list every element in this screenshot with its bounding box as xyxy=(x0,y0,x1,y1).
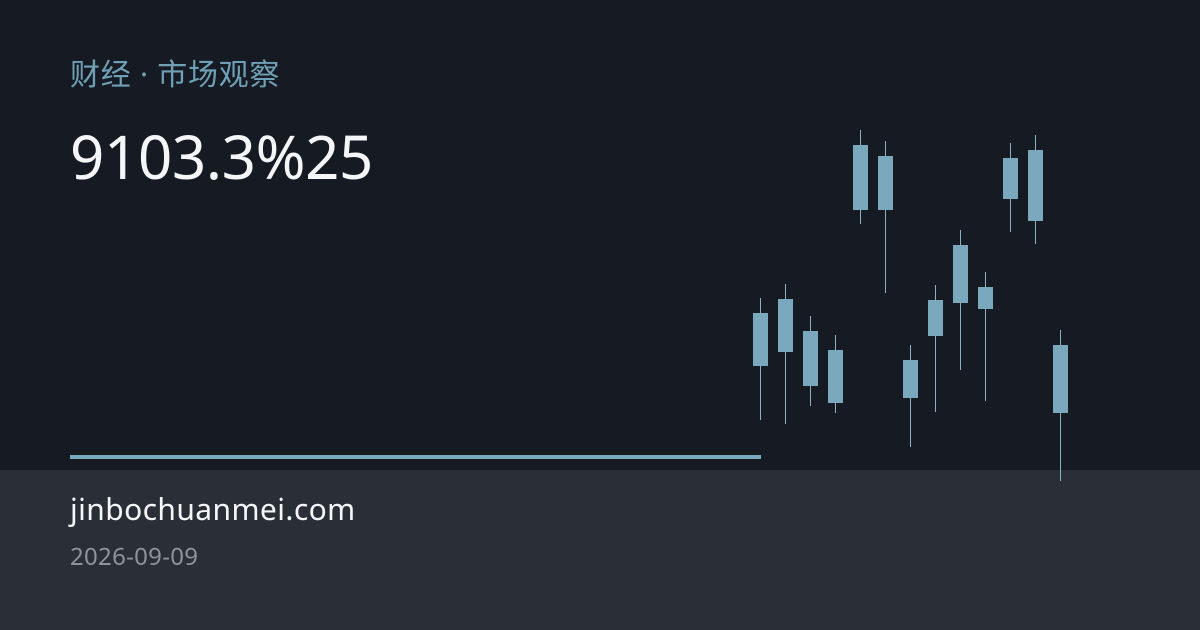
footer domain: jinbochuanmei.com xyxy=(70,488,356,529)
headline figure: 9103.3%25 xyxy=(70,115,373,197)
kicker: section label: 财经 · 市场观察 xyxy=(70,53,280,94)
footer band xyxy=(0,470,1200,630)
footer date: 2026-09-09 xyxy=(70,540,198,573)
accent rule xyxy=(70,455,761,459)
